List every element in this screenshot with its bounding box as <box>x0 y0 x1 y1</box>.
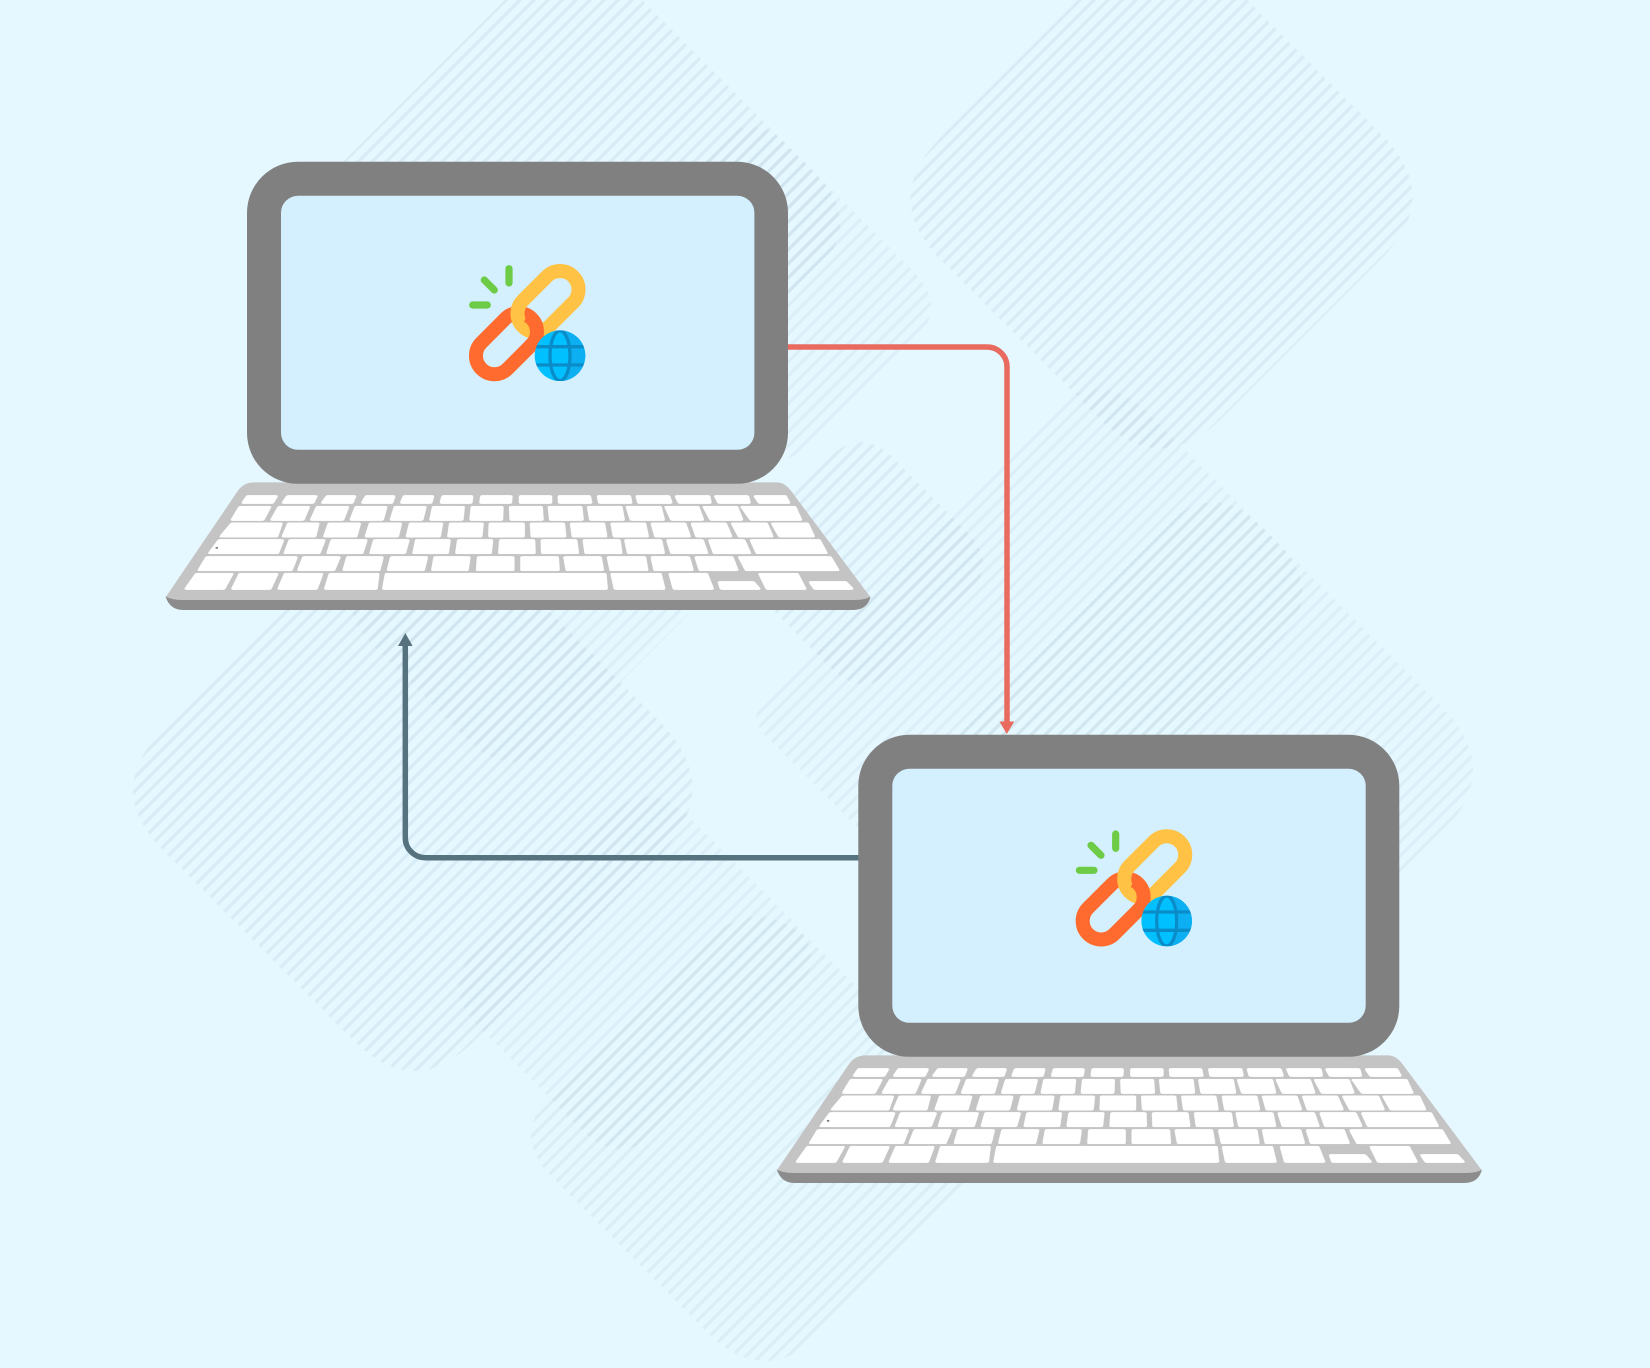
arrow: red connector from laptop 1 to laptop 2 <box>788 347 1014 734</box>
laptop 1 keyboard <box>166 482 871 610</box>
laptop 1 <box>166 162 871 610</box>
laptop 2 <box>777 735 1482 1183</box>
laptop 1 screen <box>247 162 788 484</box>
icon: broken link and globe <box>1075 829 1197 947</box>
laptop 2 screen <box>858 735 1399 1057</box>
arrow: slate connector from laptop 2 to laptop 1 <box>398 633 859 858</box>
laptop 2 keyboard <box>777 1055 1482 1183</box>
icon: broken link and globe <box>468 263 590 382</box>
